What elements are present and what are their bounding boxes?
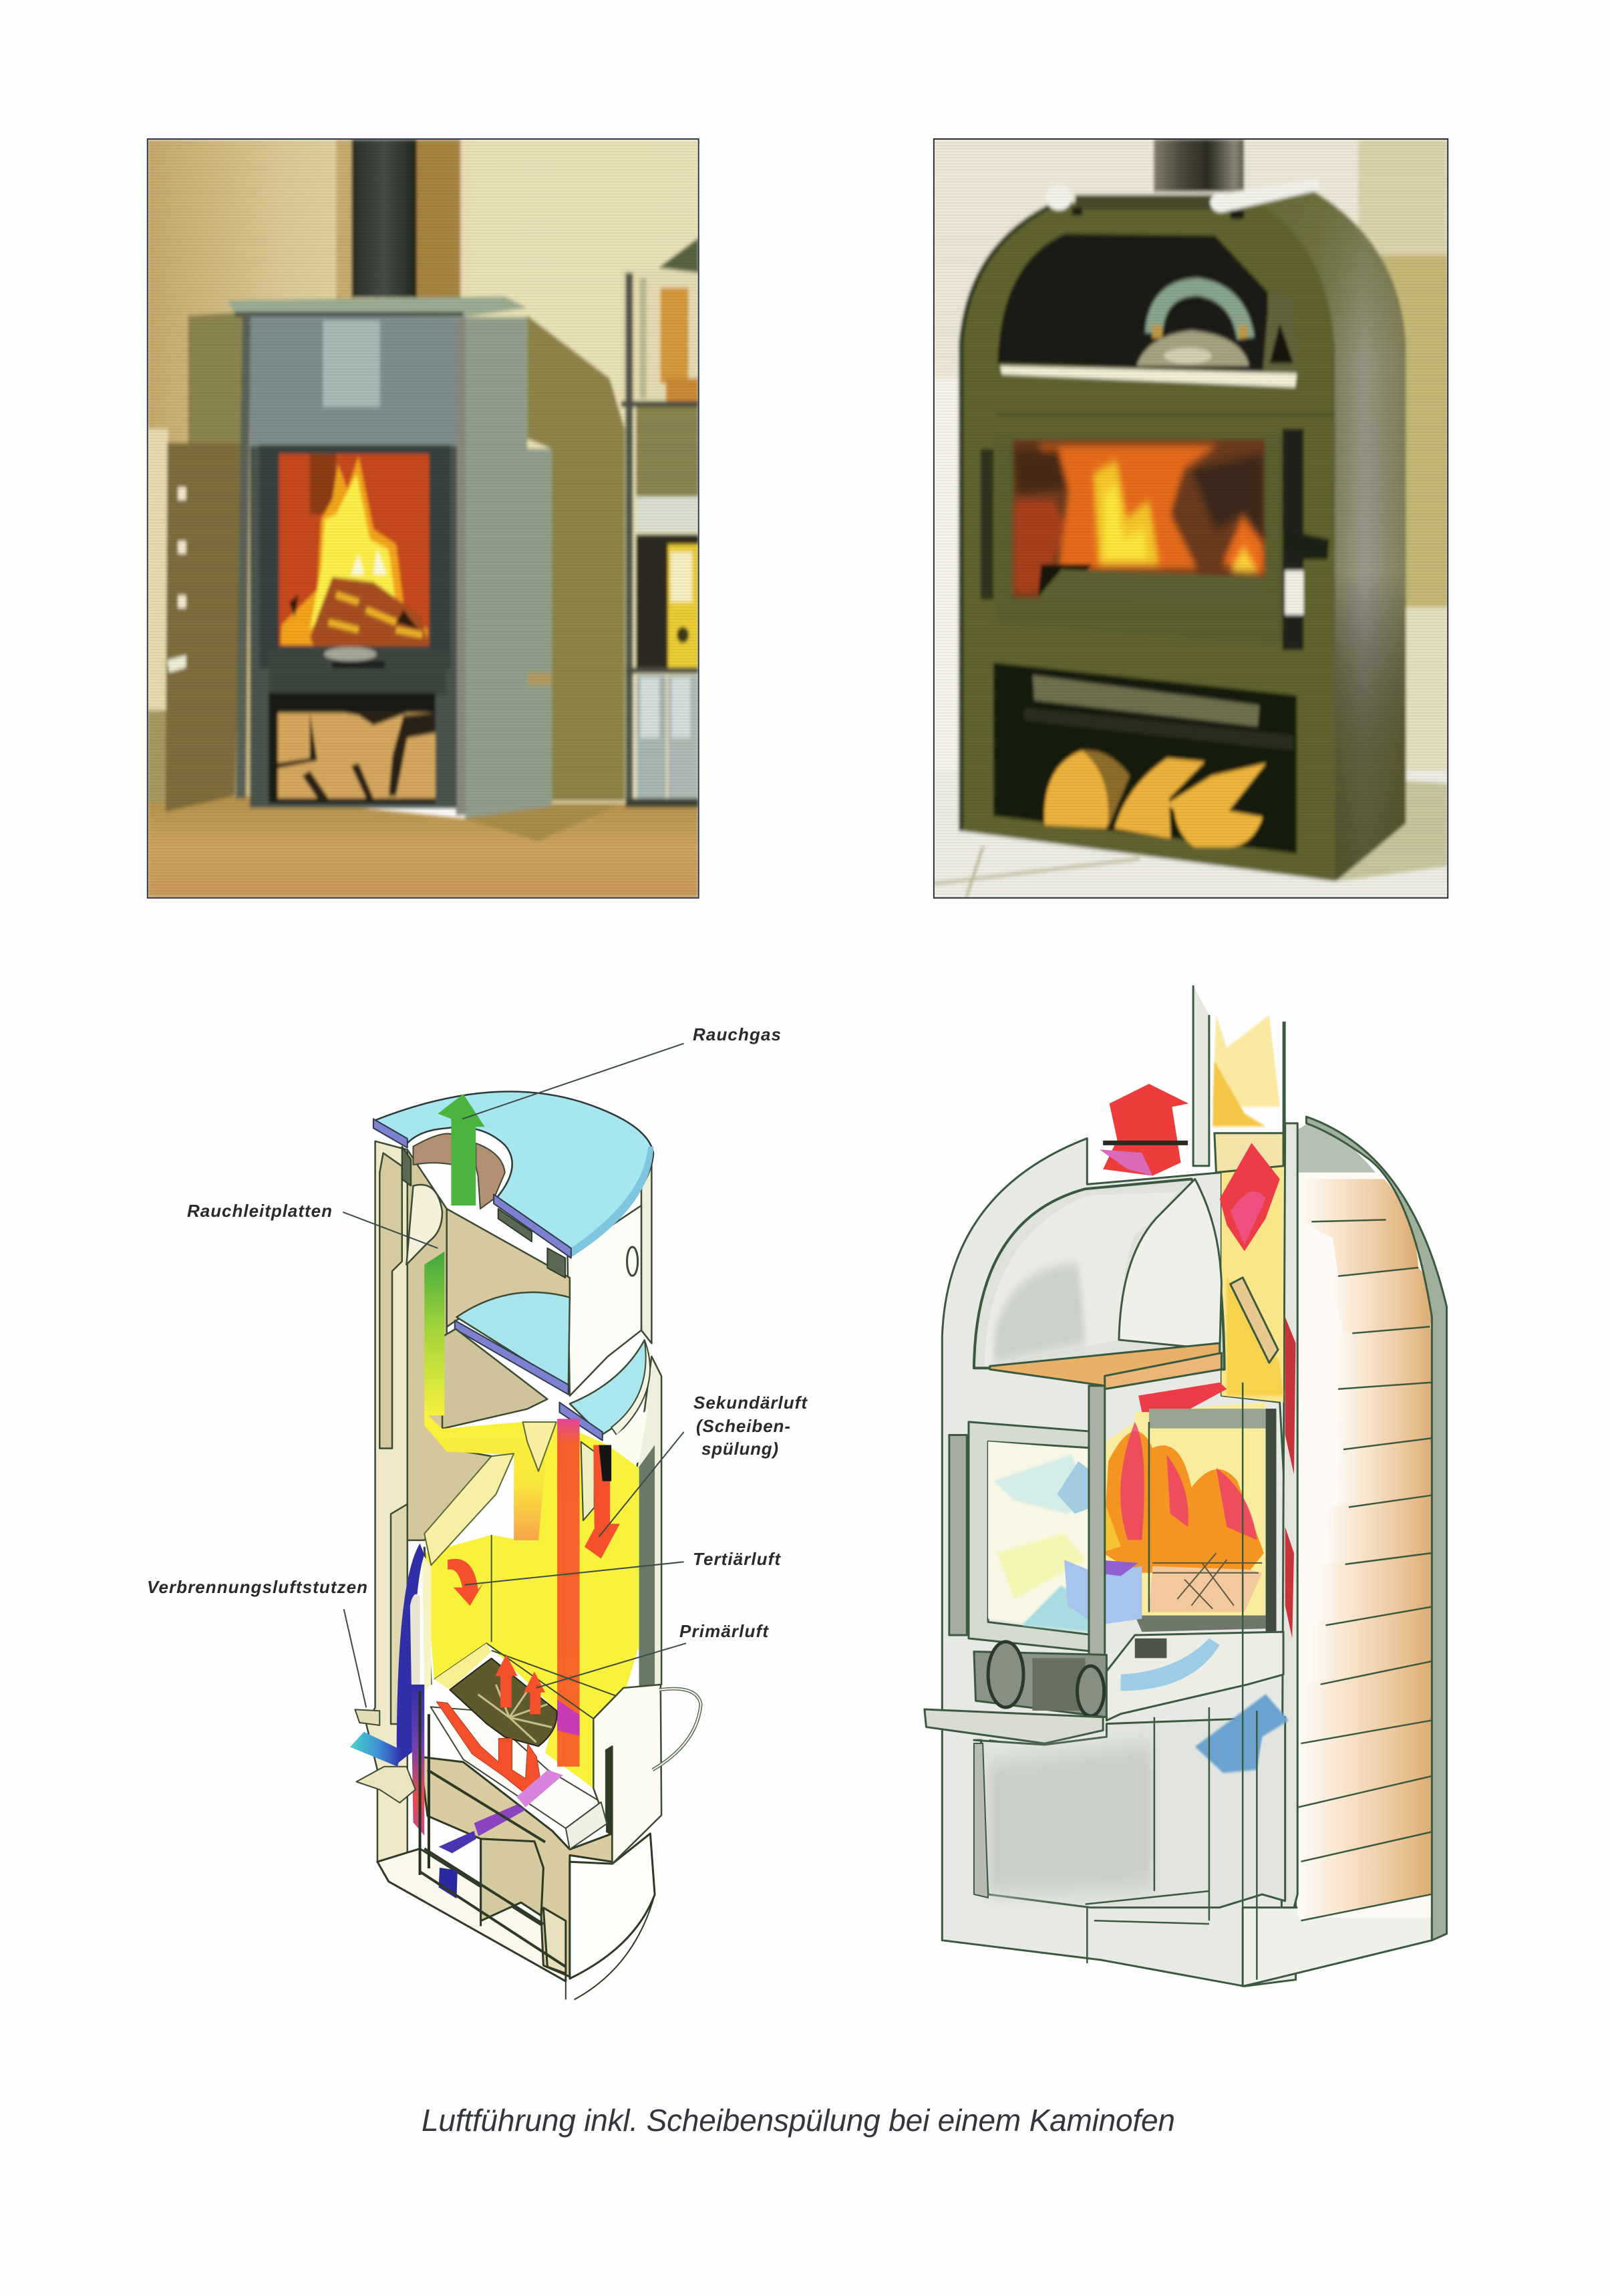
- flue pipe: [352, 139, 417, 297]
- middle teal plate: [456, 1292, 570, 1387]
- fire grate: [450, 1659, 557, 1746]
- leader line: Rauchleitplatten: [343, 1212, 438, 1248]
- label: Rauchleitplatten: Rauchleitplatten: [187, 1201, 332, 1221]
- green flue gas channel: [424, 1252, 444, 1415]
- outer drum rim: [637, 1153, 661, 1698]
- ash tray with blue air: [1106, 1632, 1283, 1721]
- grey binders: [637, 675, 666, 799]
- door lower glass: [1037, 569, 1265, 607]
- red heat marks on side: [1285, 1317, 1296, 1638]
- red secondary band: [557, 1419, 580, 1767]
- blue air blob in fire: [1064, 1560, 1142, 1625]
- outer shell front: [942, 1139, 1296, 1986]
- stove shadow on wall: [527, 315, 625, 801]
- photo: corner stove with fire: [148, 139, 699, 898]
- label: Verbrennungsluftstutzen: Verbrennungsluftstutzen: [147, 1577, 367, 1597]
- firebox lower tray: [566, 1802, 607, 1850]
- left stone wing upper: [188, 312, 243, 445]
- firebox frame: [259, 445, 450, 669]
- stove front: [961, 202, 1335, 881]
- pale left firebox edge: [422, 1554, 431, 1691]
- side lower shell: [1243, 1908, 1432, 1986]
- white floor strip under firebox: [431, 1707, 601, 1828]
- right stone wing: [466, 317, 552, 819]
- oven opening: [997, 234, 1295, 372]
- yellow binder: [668, 545, 699, 668]
- blue incoming air: [1195, 1694, 1289, 1773]
- page canvas: [147, 138, 1448, 2137]
- inner pillar: [581, 1442, 595, 1521]
- hearth lip with handle: [925, 1709, 1103, 1743]
- leader line: Tertiärluft: [465, 1562, 684, 1585]
- flames: [1103, 1431, 1264, 1573]
- door hinge column: [1283, 429, 1303, 650]
- firebox glass: [1135, 1402, 1266, 1616]
- left leg frame: [420, 1691, 429, 1875]
- leader line: Verbrennungsluftstutzen: [344, 1609, 366, 1707]
- diagram: cutaway of round stove: [343, 1044, 701, 1999]
- red flue at top: [1103, 1084, 1188, 1176]
- flue gas yellow wash: [1213, 1015, 1280, 1107]
- log store: [269, 693, 436, 803]
- logs: [1044, 750, 1126, 829]
- door post: [1089, 1386, 1105, 1658]
- flue pipe: [1154, 139, 1244, 192]
- firebox window: [279, 454, 429, 646]
- stove front upper panel: [250, 314, 457, 446]
- yellow gas channel: [424, 1412, 547, 1540]
- log store box: [974, 1717, 1285, 1908]
- upper beige chamber: [447, 1209, 570, 1327]
- room wall: [148, 139, 699, 808]
- label: Sekundärluft (Scheibenspülung): Sekundärluft: [693, 1393, 808, 1413]
- white upper drum: [568, 1205, 641, 1396]
- back wall column: [366, 1141, 492, 1862]
- firebox floor lines: [434, 1643, 621, 1719]
- bars on top: [1076, 195, 1219, 210]
- label: Tertiärluft: Tertiärluft: [693, 1549, 781, 1569]
- primary air duct: [436, 1702, 540, 1798]
- yellow firebox: [424, 1422, 639, 1788]
- log bands side wall: [1262, 1179, 1435, 1920]
- top plate: [227, 297, 527, 317]
- structural sketch lines: [1086, 1383, 1257, 1983]
- floor: [148, 796, 699, 898]
- top teal slab: [375, 1091, 653, 1252]
- leader line: Sekundärluft: [599, 1432, 684, 1537]
- third teal plate: [570, 1340, 649, 1435]
- label: Sekundärluft (Scheibenspülung): (Scheiben-: [696, 1416, 790, 1436]
- lower white drum: [570, 1834, 655, 1979]
- white shelf: [1000, 366, 1297, 388]
- leader line: Primärluft: [536, 1643, 686, 1688]
- shelf unit: [621, 270, 699, 402]
- diagram: sketched cutaway of arched stove: [925, 986, 1447, 1986]
- ash drawer: [269, 650, 447, 695]
- burning logs: [310, 577, 428, 645]
- yellow side channel: [1221, 1163, 1283, 1402]
- deflector plate: [424, 1453, 514, 1565]
- white knobs: [1046, 184, 1072, 210]
- photo frame: [934, 139, 1448, 898]
- oven arch: [974, 1179, 1225, 1369]
- door handle: [653, 1689, 701, 1770]
- right wall green rim: [1306, 1117, 1447, 1941]
- photo: arched stove with kettle: [934, 139, 1448, 898]
- air controls: [974, 1652, 1106, 1717]
- red tertiary arrow: [448, 1559, 484, 1606]
- flames: [281, 456, 428, 645]
- purple duct: [516, 1770, 563, 1808]
- lower stove base: [377, 1757, 655, 1999]
- inlet pipe: [350, 1732, 402, 1767]
- label: Sekundärluft (Scheibenspülung): [693, 1393, 808, 1459]
- red secondary arrow: [585, 1445, 620, 1558]
- white label: [1285, 571, 1303, 615]
- front posts: [236, 314, 251, 799]
- fire glow: [1037, 445, 1219, 569]
- red flame band under shelf: [1138, 1383, 1227, 1412]
- fire window: [1014, 440, 1265, 597]
- baffle bar: [1231, 1278, 1278, 1362]
- magenta band section: [557, 1700, 580, 1736]
- flue collar: [1215, 1133, 1283, 1173]
- chimney collar: [413, 1134, 454, 1165]
- leader line: Rauchgas: [462, 1044, 684, 1119]
- left stone wing lower: [166, 443, 243, 812]
- door: [993, 434, 1283, 645]
- chimney fitting column: [1281, 1123, 1297, 1908]
- label: Rauchgas: Rauchgas: [693, 1024, 781, 1044]
- log store: [993, 663, 1297, 854]
- kettle: [1136, 331, 1249, 366]
- white front door: [593, 1685, 661, 1864]
- floor: [934, 770, 1448, 898]
- pale floor front edge: [434, 1643, 492, 1690]
- label: Sekundärluft (Scheibenspülung): spülung): [701, 1439, 778, 1459]
- caption: Luftführung inkl. Scheibenspülung bei einem Kaminofen: [422, 2103, 1175, 2138]
- combustion air duct: [397, 1544, 424, 1763]
- stove side: [1256, 191, 1406, 881]
- wood and grate: [1149, 1566, 1262, 1612]
- photo frame: [148, 139, 699, 898]
- fire chamber frame: [1266, 1409, 1276, 1638]
- door glass: [988, 1441, 1096, 1632]
- side white insulation: [1297, 1123, 1432, 1917]
- label: Primärluft: Primärluft: [679, 1621, 769, 1641]
- wall shadow behind flue: [415, 139, 460, 300]
- white panel below third plate: [608, 1409, 648, 1481]
- primary arrows: [495, 1655, 518, 1707]
- flue pipe: [1193, 986, 1209, 1166]
- wooden shelf: [990, 1343, 1220, 1386]
- top clamp details: [402, 1147, 565, 1278]
- red gas blob upper: [1220, 1143, 1280, 1251]
- room wall: [934, 139, 1448, 898]
- door: [949, 1435, 967, 1635]
- green rising arrow: [438, 1094, 485, 1205]
- grey upper corner of wall: [1297, 1123, 1376, 1173]
